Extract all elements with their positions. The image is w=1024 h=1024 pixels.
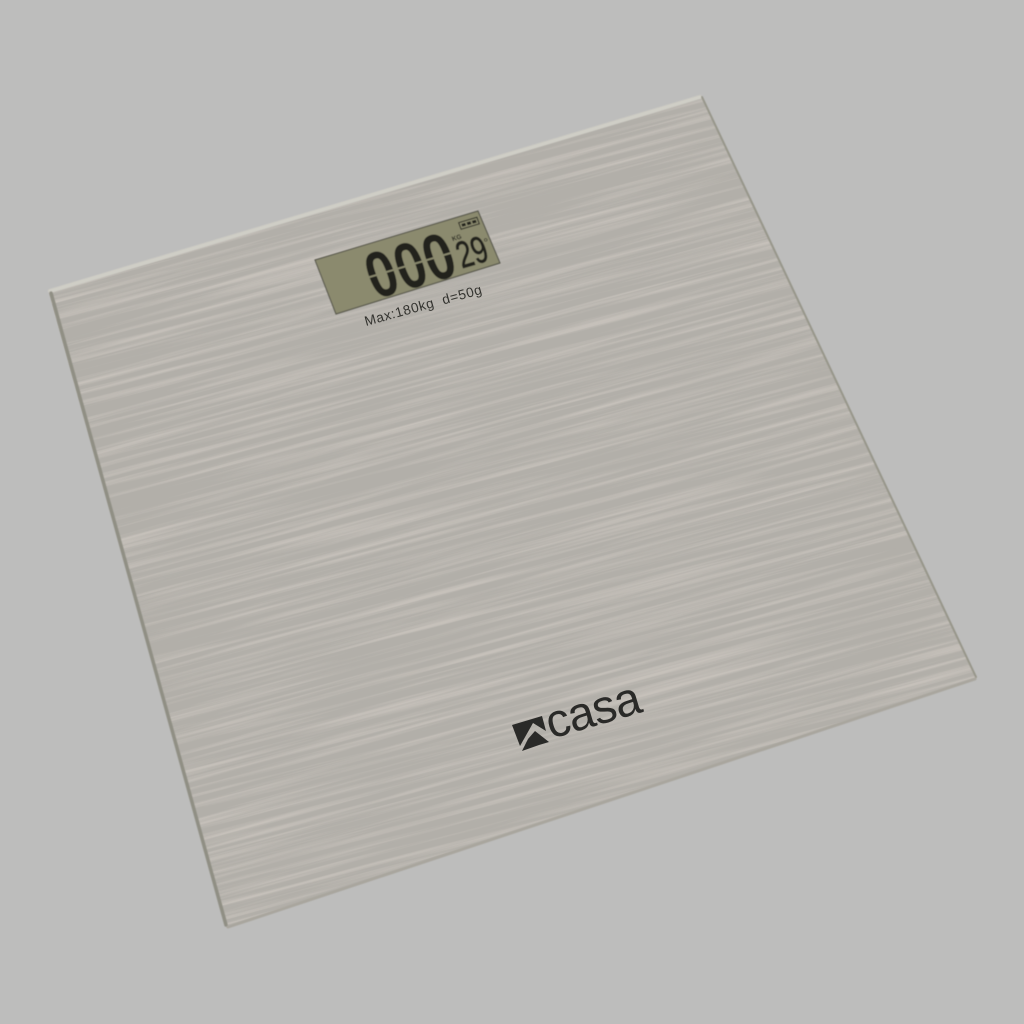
degree sign: °	[482, 235, 492, 250]
weight digits: 000	[355, 218, 466, 313]
battery icon	[459, 217, 479, 229]
logo wordmark: casa	[539, 670, 648, 749]
glass edges	[50, 97, 976, 927]
capacity label: Max:180kg d=50g	[363, 282, 483, 329]
segment gap	[366, 251, 455, 279]
LCD display	[315, 207, 502, 314]
LCD readout	[354, 207, 502, 313]
scale plate	[43, 65, 989, 930]
kg unit: KG	[451, 234, 463, 243]
LCD screen	[315, 211, 500, 314]
casa logo	[512, 670, 648, 751]
brushed stripe surface	[43, 65, 989, 930]
logo icon: house arrow	[512, 716, 549, 751]
temperature: 29	[450, 229, 494, 277]
